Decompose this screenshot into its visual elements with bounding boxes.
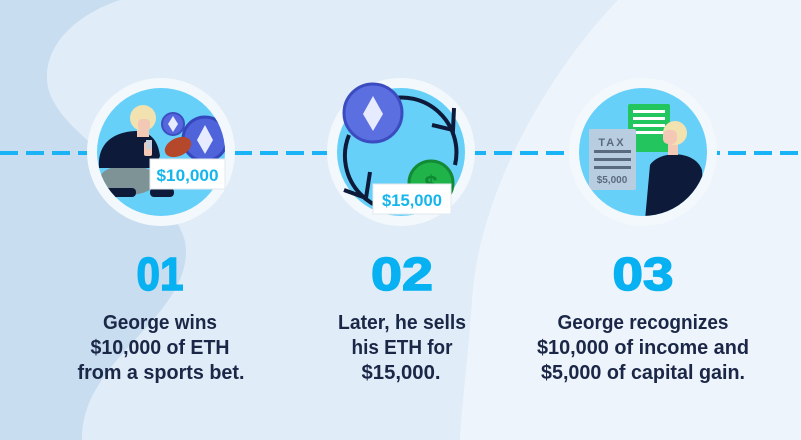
text: step 2 <box>338 312 466 384</box>
icon: dollar coin <box>409 161 453 205</box>
text: step 3: $10,000 of income and <box>537 337 749 359</box>
icon: small eth coin <box>162 113 184 135</box>
icon: tax document <box>589 129 636 190</box>
arrows cycle <box>344 97 456 211</box>
step numbers <box>136 248 674 300</box>
text: step 1: George wins <box>103 312 217 334</box>
step 3 illustration <box>572 88 717 216</box>
text: step 3: $5,000 of capital gain. <box>541 362 745 384</box>
icon: dollar coin: $ <box>424 171 438 198</box>
step 2 illustration <box>327 78 475 226</box>
text: step 3: George recognizes <box>558 312 728 334</box>
text: step 3 <box>537 312 749 384</box>
text: step 2: $15,000. <box>362 362 440 384</box>
label: $10,000: $10,000 <box>156 166 218 185</box>
icon: big eth coin <box>183 117 227 161</box>
person sitting <box>99 105 174 197</box>
step numbers: 01 <box>136 248 184 300</box>
icon: football <box>164 136 192 158</box>
label: $15,000: $15,000 <box>382 191 442 210</box>
text: step 1: from a sports bet. <box>78 362 244 384</box>
icon: green income document <box>628 104 670 152</box>
icon: tax document: TAX <box>598 137 626 149</box>
dashed timeline <box>0 151 801 155</box>
text: step 1 <box>78 312 244 384</box>
step numbers: 03 <box>612 248 674 300</box>
step numbers: 02 <box>371 248 433 300</box>
text: step 2: his ETH for <box>352 337 453 359</box>
person standing <box>645 121 705 220</box>
label: $15,000 <box>373 184 451 214</box>
text: step 1: $10,000 of ETH <box>90 337 230 359</box>
text: step 2: Later, he sells <box>338 312 466 334</box>
icon: tax document: $5,000 <box>597 175 628 186</box>
icon: eth coin <box>344 84 402 142</box>
step 1 illustration <box>87 78 235 226</box>
label: $10,000 <box>150 159 225 189</box>
